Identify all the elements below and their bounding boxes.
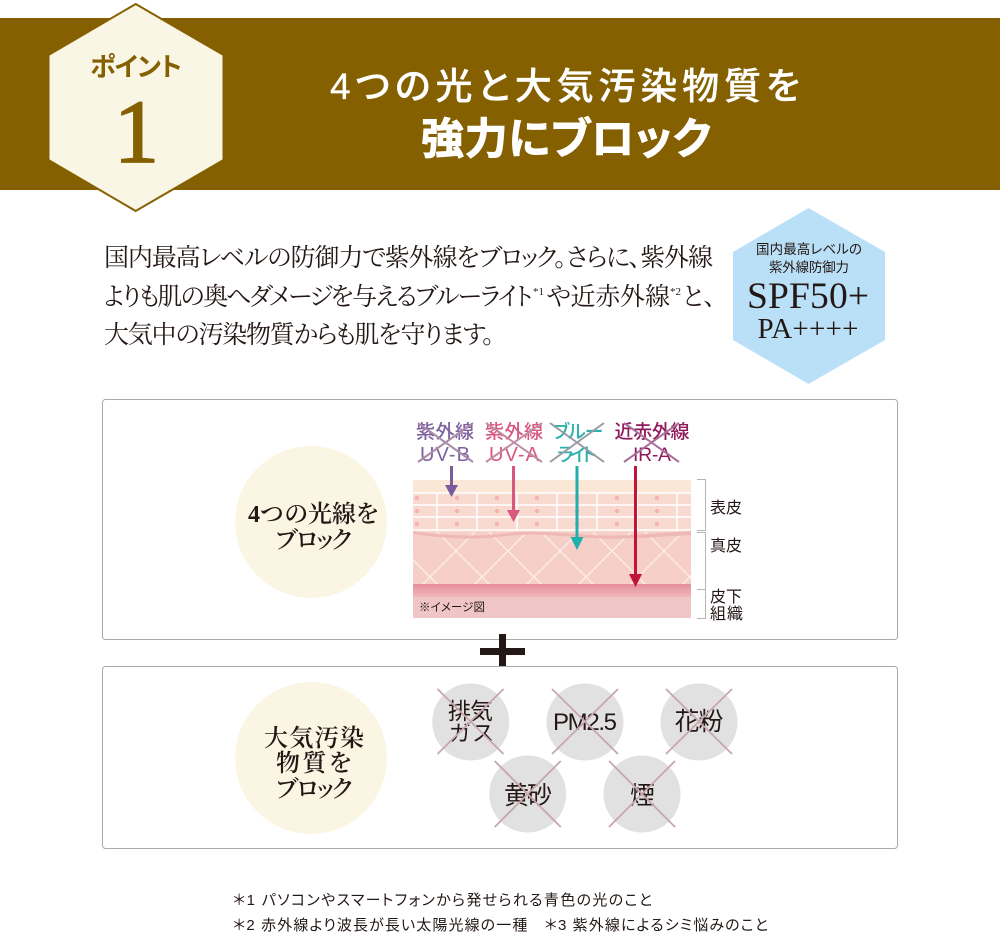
layer labels: 真皮 xyxy=(710,537,742,555)
footnotes: ＊2 赤外線より波長が長い太陽光線の一種 ＊3 紫外線によるシミ悩みのこと xyxy=(233,917,768,934)
SPF badge: 国内最高レベルの xyxy=(756,241,862,257)
circle label: block pollutants xyxy=(235,682,387,834)
pollutant: smoke xyxy=(604,756,680,832)
ray: blue light xyxy=(550,420,604,550)
skin diagram xyxy=(413,480,691,618)
point 1 hexagon badge xyxy=(48,4,224,211)
intro text: *2 xyxy=(670,286,681,298)
ray: UV-A: 紫外線 xyxy=(485,421,543,443)
intro text: と、 xyxy=(683,284,716,311)
intro text xyxy=(104,244,716,349)
SPF badge xyxy=(733,208,885,384)
footnotes xyxy=(233,892,768,934)
point 1 hexagon badge: ポイント xyxy=(90,52,182,82)
pollutant: PM2.5: PM2.5 xyxy=(553,709,617,736)
pollutant: pollen xyxy=(660,684,738,760)
ray: blue light: ライト xyxy=(557,445,597,466)
ray: UV-B: 紫外線 xyxy=(416,421,474,443)
circle label: block pollutants: 物質を xyxy=(276,750,352,777)
footnotes: ＊1 パソコンやスマートフォンから発せられる青色の光のこと xyxy=(233,892,652,909)
pollutant: yellow dust: 黄砂 xyxy=(504,782,552,810)
layer labels: 表皮 xyxy=(710,499,742,517)
intro text: よりも肌の奥へダメージを与えるブルーライト xyxy=(104,283,533,311)
intro text: 国内最高レベルの防御力で紫外線をブロック。さらに、紫外線 xyxy=(104,244,713,272)
ray: UV-A xyxy=(485,421,543,522)
pollutant: yellow dust xyxy=(489,756,566,832)
ray: blue light: ブルー xyxy=(552,420,604,443)
title: 4つの光と大気汚染物質を xyxy=(330,66,800,107)
ray: near infrared: IR-A xyxy=(633,444,671,466)
circle label: block pollutants: ブロック xyxy=(276,776,352,803)
intro text: 大気中の汚染物質からも肌を守ります。 xyxy=(104,321,495,349)
panel: air pollutants xyxy=(102,666,898,848)
ray: UV-A: UV-A xyxy=(489,444,540,466)
pollutant: exhaust gas: 排気 xyxy=(448,698,493,724)
SPF badge: PA++++ xyxy=(758,313,858,345)
title xyxy=(330,66,800,164)
ray: near infrared xyxy=(614,421,690,587)
note: image only: ※イメージ図 xyxy=(419,601,485,614)
ray: near infrared: 近赤外線 xyxy=(614,421,690,443)
pollutant: pollen: 花粉 xyxy=(674,708,724,736)
ray: UV-B: UV-B xyxy=(420,444,470,466)
pollutant: exhaust gas xyxy=(432,684,509,760)
pollutant: exhaust gas: ガス xyxy=(449,721,493,746)
circle label: block 4 rays: ブロック xyxy=(275,527,352,554)
plus sign xyxy=(480,634,525,675)
SPF badge: 紫外線防御力 xyxy=(769,260,849,275)
layer labels xyxy=(697,480,743,623)
circle label: block 4 rays: 4つの光線を xyxy=(248,501,379,528)
layer labels: 皮下 xyxy=(710,588,742,606)
point 1 hexagon badge: 1 xyxy=(114,83,159,182)
panel: four light rays xyxy=(102,400,898,640)
layer labels: 組織 xyxy=(710,605,743,623)
title: 強力にブロック xyxy=(421,116,711,164)
SPF badge: SPF50+ xyxy=(747,276,869,317)
intro text: や近赤外線 xyxy=(546,283,670,311)
circle label: block 4 rays xyxy=(235,446,387,598)
pollutant: PM2.5 xyxy=(546,684,624,760)
header band xyxy=(0,18,1000,190)
pollutant: smoke: 煙 xyxy=(630,782,655,810)
intro text: *1 xyxy=(533,286,544,298)
ray: UV-B xyxy=(416,421,474,497)
circle label: block pollutants: 大気汚染 xyxy=(264,725,364,752)
